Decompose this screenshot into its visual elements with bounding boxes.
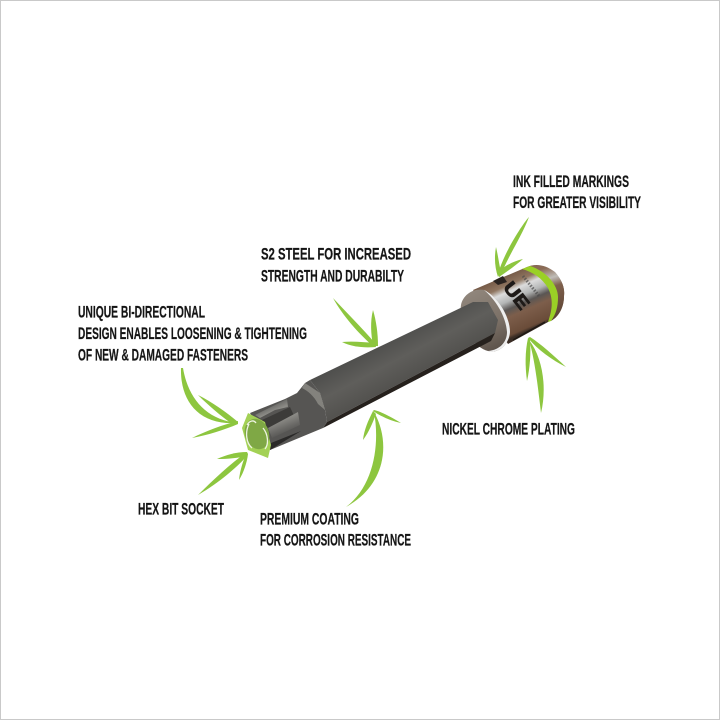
callout: premium coating: FOR CORROSION RESISTANCE: [260, 530, 411, 550]
arrow: nickel chrome plating: [526, 337, 566, 413]
callout: S2 steel: S2 STEEL FOR INCREASED: [261, 244, 411, 264]
drive socket body: [473, 265, 564, 344]
callout: bi-directional design: [78, 302, 307, 364]
socket laser markings: UE: [499, 278, 534, 314]
callout: bi-directional design: DESIGN ENABLES LOOSENING & TIGHTENING: [78, 324, 307, 343]
collar: [461, 290, 510, 352]
arrow: hex bit socket: [198, 452, 248, 495]
callout: bi-directional design: UNIQUE BI-DIRECTIONAL: [78, 302, 205, 322]
callout: S2 steel: [261, 244, 411, 286]
callout: ink filled markings: FOR GREATER VISIBILITY: [513, 193, 641, 212]
socket bit illustration: [241, 265, 564, 458]
shoulder and torx tip: [250, 380, 327, 450]
hex opening, green: [241, 413, 273, 458]
callout: ink filled markings: [513, 172, 641, 212]
arrow: bi-directional design: [181, 368, 238, 438]
hex shaft: [310, 302, 498, 428]
arrow: S2 steel: [333, 298, 378, 347]
callout: bi-directional design: OF NEW & DAMAGED FASTENERS: [78, 346, 248, 364]
arrow: premium coating: [346, 410, 401, 507]
callout: nickel chrome plating: NICKEL CHROME PLATING: [442, 420, 575, 438]
callout: premium coating: PREMIUM COATING: [260, 510, 359, 528]
callout: ink filled markings: INK FILLED MARKINGS: [513, 172, 629, 191]
callout: hex bit socket: HEX BIT SOCKET: [138, 500, 224, 518]
callout: S2 steel: STRENGTH AND DURABILTY: [261, 266, 404, 286]
green marking band: [522, 266, 558, 322]
arrow: ink filled markings: [495, 217, 529, 277]
callout: premium coating: [260, 510, 411, 550]
